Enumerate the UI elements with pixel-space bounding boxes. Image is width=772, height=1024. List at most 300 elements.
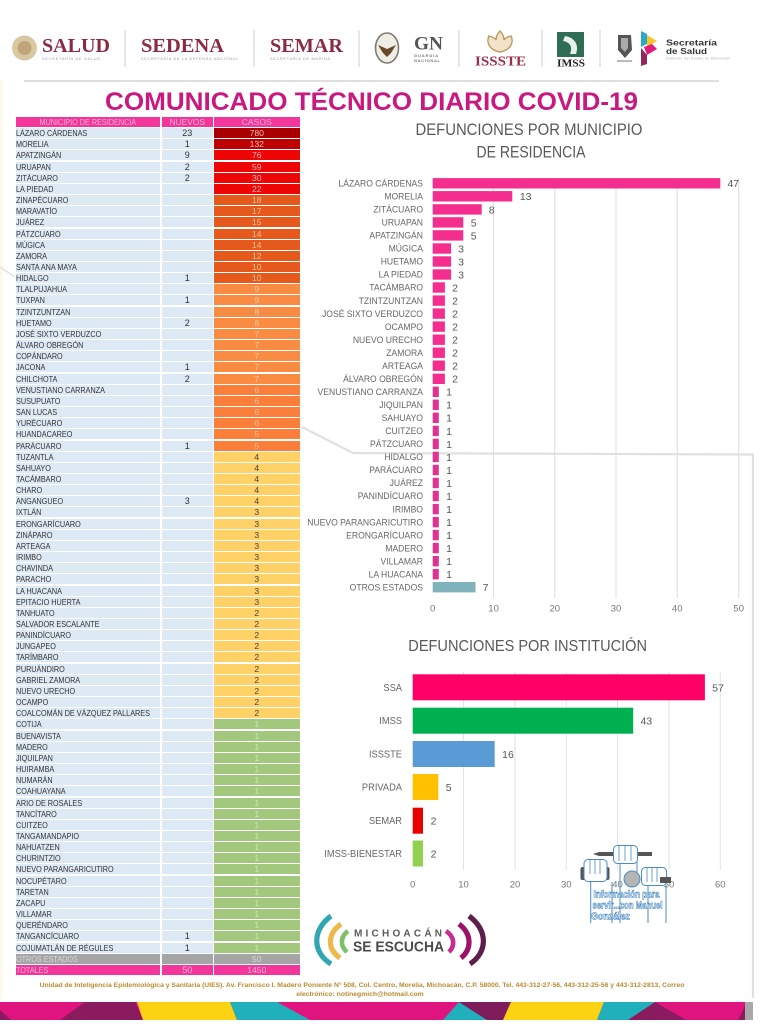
rows: 1 case (green): 1 <box>254 931 259 941</box>
footer contact text: Unidad de Inteligencia Epidemiológica y Sanitaria (UIES). Av. Francisco I. Madero Poniente N° 508, Col. Centro, Morelia, Michoacán, C.P. 58000. Tel. 443-312-27-56, 443-312-25-56 y 443-312-2813, Correo <box>40 982 684 989</box>
rows: 5 to 9 cases (orange): JOSÉ SIXTO VERDUZCO <box>16 329 101 339</box>
logo: SALUD <box>12 35 110 61</box>
rows: highest case counts (red): APATZINGÁN <box>16 150 61 160</box>
bar: IMSS-BIENESTAR 2: IMSS-BIENESTAR <box>324 849 402 860</box>
bars <box>433 178 720 592</box>
bar: PRIVADA 5: PRIVADA <box>362 782 403 794</box>
rows: 2 to 4 cases (yellow): IRIMBO <box>16 552 42 562</box>
table header: MUNICIPIO DE RESIDENCIA <box>40 117 136 127</box>
bar category labels: OTROS ESTADOS <box>350 582 423 592</box>
rows: 2 to 4 cases (yellow): 3 <box>254 519 259 529</box>
rows: 2 to 4 cases (yellow): 2 <box>254 619 259 629</box>
rows: 2 to 4 cases (yellow): 3 <box>254 574 259 584</box>
rows: 5 to 9 cases (orange): 8 <box>254 318 259 328</box>
rows: 1 case (green): 1 <box>254 786 259 796</box>
bar: SSA 57: 57 <box>712 682 724 694</box>
row: totales: 50 <box>182 965 192 975</box>
rows: highest case counts (red): LA PIEDAD <box>16 184 53 194</box>
rows: 5 to 9 cases (orange): JACONA <box>16 362 45 372</box>
rows: 10 to 18 cases (dark orange): 12 <box>252 251 262 261</box>
watermark text: Información para <box>594 890 660 900</box>
footer contact text <box>40 982 684 998</box>
bar value labels: 1 <box>446 517 452 529</box>
bar value labels: 2 <box>452 335 458 347</box>
rows: 5 to 9 cases (orange): COPÁNDARO <box>16 351 63 361</box>
rows: 2 to 4 cases (yellow): 2 <box>254 675 259 685</box>
rows: 2 to 4 cases (yellow): ZINÁPARO <box>16 530 53 540</box>
rows: 1 case (green): CUITZEO <box>16 820 48 830</box>
rows: 5 to 9 cases (orange): TUXPAN <box>16 295 45 305</box>
table header: NUEVOS <box>170 117 205 127</box>
rows: 2 to 4 cases (yellow): 3 <box>254 530 259 540</box>
watermark text: González <box>591 912 630 922</box>
bar category labels: IRIMBO <box>392 504 423 514</box>
logo: Guardia Nacional <box>376 33 443 63</box>
rows: 1 case (green): 1 <box>254 809 259 819</box>
rows: 2 to 4 cases (yellow): 2 <box>254 697 259 707</box>
rows: highest case counts (red): LÁZARO CÁRDENAS <box>16 128 87 138</box>
rows: 1 case (green): TARETAN <box>16 887 49 897</box>
bar value labels: 7 <box>483 582 489 594</box>
rows: 2 to 4 cases (yellow): 2 <box>254 641 259 651</box>
icon: hand with pencil <box>593 846 652 864</box>
rows: 1 case (green): 1 <box>185 943 190 953</box>
bar value labels: 1 <box>446 478 452 490</box>
x axis labels: 30 <box>611 604 621 614</box>
rows: 5 to 9 cases (orange): 9 <box>254 284 259 294</box>
rows: 5 to 9 cases (orange): CHILCHOTA <box>16 374 57 384</box>
rows: 2 to 4 cases (yellow): TUZANTLA <box>16 452 53 462</box>
bar category labels: APATZINGÁN <box>369 230 423 241</box>
bar value labels: 1 <box>446 439 452 451</box>
bar category labels: VENUSTIANO CARRANZA <box>318 387 423 397</box>
rows: 1 case (green): 1 <box>254 943 259 953</box>
rows: 10 to 18 cases (dark orange): ZAMORA <box>16 251 47 261</box>
rows: 5 to 9 cases (orange): 6 <box>254 407 259 417</box>
rows: 5 to 9 cases (orange): 9 <box>254 295 259 305</box>
rows: 10 to 18 cases (dark orange): 10 <box>252 273 262 283</box>
bar value labels: 5 <box>471 217 477 229</box>
rows: 2 to 4 cases (yellow): SAHUAYO <box>16 463 51 473</box>
logo: Michoacán state emblem <box>617 35 632 62</box>
rows: 1 case (green): BUENAVISTA <box>16 731 61 741</box>
bar category labels: MORELIA <box>384 191 423 202</box>
bar category labels: NUEVO PARANGARICUTIRO <box>307 517 423 527</box>
rows: 5 to 9 cases (orange): VENUSTIANO CARRANZA <box>16 385 105 395</box>
rows: highest case counts (red): ZITÁCUARO <box>16 173 58 183</box>
row: otros estados: 50 <box>252 954 262 964</box>
bar category labels: LÁZARO CÁRDENAS <box>339 178 423 189</box>
rows: 10 to 18 cases (dark orange): 1 <box>185 273 190 283</box>
rows: 1 case (green): TANCÍTARO <box>16 809 57 819</box>
rows: 2 to 4 cases (yellow): PURUÁNDIRO <box>16 664 65 674</box>
rows: 10 to 18 cases (dark orange): 10 <box>252 262 262 272</box>
rows: 2 to 4 cases (yellow): 3 <box>185 496 190 506</box>
rows: 5 to 9 cases (orange): HUANDACAREO <box>16 429 72 439</box>
x axis labels <box>430 604 744 614</box>
rows: 2 to 4 cases (yellow): CHAVINDA <box>16 563 53 573</box>
rows: highest case counts (red): 9 <box>185 150 190 160</box>
row: totales: 1450 <box>247 965 266 975</box>
bar: ISSSTE 16: 16 <box>502 749 514 761</box>
bar value labels: 2 <box>452 296 458 308</box>
logo: SEDENA: SEDENA <box>141 35 224 57</box>
rows: 2 to 4 cases (yellow): NUEVO URECHO <box>16 686 75 696</box>
bar value labels: 1 <box>446 491 452 503</box>
rows: 10 to 18 cases (dark orange): MÚGICA <box>16 240 45 250</box>
x axis labels: 20 <box>510 880 520 890</box>
rows: 1 case (green): 1 <box>254 864 259 874</box>
rows: 1 case (green): NOCUPÉTARO <box>16 876 67 886</box>
rows: highest case counts (red): 780 <box>250 128 264 138</box>
rows: 2 to 4 cases (yellow): JUNGAPEO <box>16 641 56 651</box>
logo: SEMAR: SECRETARÍA DE MARINA <box>270 57 330 61</box>
bar: IMSS 43: 43 <box>640 716 652 728</box>
bar category labels: PARÁCUARO <box>369 465 423 475</box>
rows: 5 to 9 cases (orange): 2 <box>185 374 190 384</box>
rows: 5 to 9 cases (orange) <box>16 284 300 451</box>
rows: 1 case (green): NUEVO PARANGARICUTIRO <box>16 864 114 874</box>
rows: 5 to 9 cases (orange): SAN LUCAS <box>16 407 57 417</box>
rows: 1 case (green): 1 <box>254 775 259 785</box>
rows: 10 to 18 cases (dark orange): SANTA ANA MAYA <box>16 262 77 272</box>
rows: 2 to 4 cases (yellow): EPITACIO HUERTA <box>16 597 80 607</box>
bar category labels: MADERO <box>385 543 423 553</box>
bar category labels: TZINTZUNTZAN <box>359 296 423 306</box>
rows: 1 case (green): 1 <box>254 842 259 852</box>
bar category labels: ZAMORA <box>386 348 423 358</box>
rows: 10 to 18 cases (dark orange): 17 <box>252 206 262 216</box>
footer contact text: electrónico: notinegmich@hotmail.com <box>296 991 424 998</box>
rows: 5 to 9 cases (orange): 7 <box>254 329 259 339</box>
bar category labels: ZITÁCUARO <box>373 204 423 215</box>
rows: 2 to 4 cases (yellow): ARTEAGA <box>16 541 50 551</box>
rows: 1 case (green): 1 <box>254 753 259 763</box>
rows: highest case counts (red): 22 <box>252 184 262 194</box>
rows: 2 to 4 cases (yellow): OCAMPO <box>16 697 48 707</box>
rows: 10 to 18 cases (dark orange): 18 <box>252 195 262 205</box>
rows: 1 case (green): 1 <box>254 920 259 930</box>
rows: 1 case (green): 1 <box>254 887 259 897</box>
bar value labels: 47 <box>727 178 739 190</box>
bar value labels: 1 <box>446 543 452 555</box>
rows: highest case counts (red): 76 <box>252 150 262 160</box>
rows: 1 case (green): 1 <box>254 876 259 886</box>
rows: 1 case (green): JIQUILPAN <box>16 753 53 763</box>
rows: 5 to 9 cases (orange): 6 <box>254 396 259 406</box>
row: totales: TOTALES <box>16 965 48 975</box>
rows: 5 to 9 cases (orange): 6 <box>254 385 259 395</box>
icon: hand with phone <box>580 860 610 882</box>
bar category labels: LA PIEDAD <box>379 269 423 280</box>
x axis labels: 20 <box>550 604 560 614</box>
rows: 5 to 9 cases (orange): 2 <box>185 318 190 328</box>
rows: 2 to 4 cases (yellow): 3 <box>254 507 259 517</box>
bar value labels: 3 <box>458 269 464 281</box>
rows: 2 to 4 cases (yellow): 2 <box>254 608 259 618</box>
bar value labels: 5 <box>471 230 477 242</box>
chart heading: DEFUNCIONES POR MUNICIPIO <box>416 121 643 139</box>
bar category labels: JOSÉ SIXTO VERDUZCO <box>322 309 423 319</box>
logo: Guardia Nacional: GN <box>414 34 443 54</box>
rows: 5 to 9 cases (orange): 8 <box>254 307 259 317</box>
x axis labels <box>410 880 726 890</box>
bar value labels: 3 <box>458 243 464 255</box>
rows: 5 to 9 cases (orange): ÁLVARO OBREGÓN <box>16 340 83 350</box>
rows: 2 to 4 cases (yellow): SALVADOR ESCALANTE <box>16 619 99 629</box>
rows: 2 to 4 cases (yellow): 4 <box>254 496 259 506</box>
rows: 2 to 4 cases (yellow): 3 <box>254 552 259 562</box>
bar value labels: 1 <box>446 530 452 542</box>
bar: PRIVADA 5: 5 <box>446 782 452 794</box>
bar value labels: 8 <box>489 204 495 216</box>
rows: highest case counts (red): 30 <box>252 173 262 183</box>
rows: 2 to 4 cases (yellow): 4 <box>254 452 259 462</box>
x axis labels: 40 <box>672 604 682 614</box>
rows: highest case counts (red): MORELIA <box>16 139 49 149</box>
rows: 1 case (green): 1 <box>254 719 259 729</box>
icon: hand with recorder <box>642 868 671 886</box>
bar value labels: 2 <box>452 348 458 360</box>
rows: 1 case (green): 1 <box>254 742 259 752</box>
bar category labels: CUITZEO <box>385 426 423 436</box>
bar category labels: ARTEAGA <box>382 361 423 371</box>
bar category labels: SAHUAYO <box>382 413 423 423</box>
bar value labels: 1 <box>446 452 452 464</box>
bar category labels: TACÁMBARO <box>369 282 423 293</box>
rows: highest case counts (red): 59 <box>252 162 262 172</box>
logo: Guardia Nacional: NACIONAL <box>414 58 441 63</box>
rows: 2 to 4 cases (yellow): COALCOMÁN DE VÁZQUEZ PALLARES <box>16 708 150 718</box>
rows: 2 to 4 cases (yellow): PANINDÍCUARO <box>16 630 71 640</box>
bar: IMSS 43: IMSS <box>379 716 402 727</box>
rows: 1 case (green): 1 <box>254 898 259 908</box>
rows: 1 case (green): MADERO <box>16 742 48 752</box>
rows: 10 to 18 cases (dark orange): JUÁREZ <box>16 217 44 227</box>
rows: highest case counts (red): 1 <box>185 139 190 149</box>
rows: 1 case (green): 1 <box>254 820 259 830</box>
chart heading: DE RESIDENCIA <box>476 144 586 162</box>
row: otros estados <box>16 954 300 964</box>
rows: 2 to 4 cases (yellow) <box>16 452 300 718</box>
rows: 2 to 4 cases (yellow): 2 <box>254 630 259 640</box>
rows: 1 case (green): 1 <box>254 909 259 919</box>
logo: ISSSTE: ISSSTE <box>475 54 526 70</box>
row: otros estados: OTROS ESTADOS <box>16 954 78 964</box>
rows: 1 case (green): CHURINTZIO <box>16 853 61 863</box>
bar: IMSS 43 <box>379 708 652 734</box>
rows: highest case counts (red) <box>16 128 300 194</box>
row: totales <box>16 965 300 975</box>
logo: ISSSTE <box>475 31 526 70</box>
rows: 1 case (green): HUIRAMBA <box>16 764 54 774</box>
rows: 1 case (green): ARIO DE ROSALES <box>16 798 82 808</box>
chart heading <box>416 121 643 162</box>
rows: 5 to 9 cases (orange): PARÁCUARO <box>16 441 61 451</box>
bar category labels: ÁLVARO OBREGÓN <box>343 374 423 384</box>
bar: SSA 57: SSA <box>383 683 403 694</box>
chart heading: DEFUNCIONES POR INSTITUCIÓN <box>408 636 647 655</box>
bar category labels: MÚGICA <box>389 243 423 254</box>
rows: 2 to 4 cases (yellow): 4 <box>254 485 259 495</box>
logo: Secretaría de Salud: de Salud <box>666 47 707 56</box>
rows: 10 to 18 cases (dark orange): 14 <box>252 229 262 239</box>
rows: 1 case (green): TANGAMANDAPIO <box>16 831 79 841</box>
logo: IMSS <box>557 32 586 70</box>
table header <box>16 117 300 127</box>
rows: 1 case (green): NAHUATZEN <box>16 842 60 852</box>
rows: 5 to 9 cases (orange): 5 <box>254 441 259 451</box>
rows: 2 to 4 cases (yellow): GABRIEL ZAMORA <box>16 675 80 685</box>
rows: 1 case (green): ZACAPU <box>16 898 45 908</box>
rows: 2 to 4 cases (yellow): 2 <box>254 686 259 696</box>
bar value labels: 1 <box>446 569 452 581</box>
logo: Michoacán se escucha: SE ESCUCHA <box>353 940 444 956</box>
bar rows <box>307 178 739 594</box>
rows: 10 to 18 cases (dark orange): HIDALGO <box>16 273 49 283</box>
rows: 5 to 9 cases (orange): 7 <box>254 374 259 384</box>
rows: 5 to 9 cases (orange): 6 <box>254 418 259 428</box>
bar category labels: LA HUACANA <box>369 569 423 579</box>
bar category labels: ERONGARÍCUARO <box>346 530 423 540</box>
rows: 2 to 4 cases (yellow): IXTLÁN <box>16 507 41 517</box>
rows: 2 to 4 cases (yellow): 4 <box>254 463 259 473</box>
rows: 10 to 18 cases (dark orange): 14 <box>252 240 262 250</box>
bar: IMSS-BIENESTAR 2 <box>324 840 437 866</box>
rows: highest case counts (red): 2 <box>185 173 190 183</box>
logo: IMSS: IMSS <box>557 58 586 70</box>
rows: 1 case (green): 1 <box>254 798 259 808</box>
bar category labels: JUÁREZ <box>390 478 424 488</box>
table: casos por municipio de residencia <box>16 117 300 975</box>
bar category labels: OCAMPO <box>385 322 423 332</box>
bar value labels: 2 <box>452 308 458 320</box>
title: COMUNICADO TÉCNICO DIARIO COVID-19 <box>105 87 638 116</box>
logo: SALUD: SECRETARÍA DE SALUD <box>42 57 100 61</box>
rows: 5 to 9 cases (orange): YURÉCUARO <box>16 418 62 428</box>
rows: highest case counts (red): 2 <box>185 162 190 172</box>
bar value labels: 1 <box>446 400 452 412</box>
rows: 2 to 4 cases (yellow): 3 <box>254 586 259 596</box>
bar value labels: 1 <box>446 387 452 399</box>
bar value labels: 1 <box>446 426 452 438</box>
rows: 1 case (green): COAHUAYANA <box>16 786 66 796</box>
rows: 1 case (green): 1 <box>254 764 259 774</box>
rows: 2 to 4 cases (yellow): TANHUATO <box>16 608 55 618</box>
rows: 5 to 9 cases (orange): SUSUPUATO <box>16 396 60 406</box>
rows: 2 to 4 cases (yellow): 2 <box>254 664 259 674</box>
bar category labels: PANINDÍCUARO <box>358 491 423 501</box>
watermark text <box>591 890 663 922</box>
rows: 1 case (green) <box>16 719 300 953</box>
bar: IMSS-BIENESTAR 2: 2 <box>431 848 437 860</box>
bar value labels <box>446 178 739 594</box>
rows: highest case counts (red): 23 <box>182 128 192 138</box>
bar category labels: HIDALGO <box>384 452 423 462</box>
rows: 5 to 9 cases (orange): 5 <box>254 429 259 439</box>
rows: 2 to 4 cases (yellow): 3 <box>254 541 259 551</box>
bar: SEMAR 2: 2 <box>431 816 437 828</box>
rows: highest case counts (red): 132 <box>250 139 264 149</box>
rows: 1 case (green): COTIJA <box>16 719 42 729</box>
rows: 1 case (green): 1 <box>254 731 259 741</box>
rows: 2 to 4 cases (yellow): PARACHO <box>16 574 51 584</box>
rows: 2 to 4 cases (yellow): LA HUACANA <box>16 586 62 596</box>
bar value labels: 1 <box>446 556 452 568</box>
rows: 10 to 18 cases (dark orange): 15 <box>252 217 262 227</box>
rows: 10 to 18 cases (dark orange): MARAVATÍO <box>16 206 57 216</box>
bar: SEMAR 2: SEMAR <box>369 816 402 827</box>
bar: ISSSTE 16 <box>369 741 514 767</box>
rows: 5 to 9 cases (orange): TLALPUJAHUA <box>16 284 67 294</box>
bar category labels: PÁTZCUARO <box>370 439 423 449</box>
logo: Guardia Nacional: GUARDIA <box>414 53 438 58</box>
bar value labels: 2 <box>452 322 458 334</box>
x axis labels: 40 <box>612 880 623 890</box>
rows: 1 case (green): 1 <box>254 853 259 863</box>
x axis labels: 30 <box>561 880 572 890</box>
x axis labels: 0 <box>410 880 415 890</box>
bar category labels: URUAPAN <box>382 217 423 228</box>
rows: 5 to 9 cases (orange): 1 <box>185 295 190 305</box>
x axis labels: 0 <box>430 604 435 614</box>
watermark text: servir...con Manuel <box>592 900 663 912</box>
x axis labels: 50 <box>664 880 674 890</box>
bar: ISSSTE 16: ISSSTE <box>369 749 403 761</box>
icon: microphone disc <box>624 871 640 887</box>
rows: 1 case (green): COJUMATLÁN DE RÉGULES <box>16 943 113 953</box>
logo: SEMAR: SEMAR <box>270 35 343 57</box>
rows: 2 to 4 cases (yellow): TACÁMBARO <box>16 474 61 484</box>
rows: 5 to 9 cases (orange): 1 <box>185 362 190 372</box>
bar: PRIVADA 5 <box>362 774 452 800</box>
bar value labels: 3 <box>458 256 464 268</box>
rows: 10 to 18 cases (dark orange): ZINAPÉCUARO <box>16 195 68 205</box>
bar value labels: 13 <box>520 191 532 203</box>
logo: Secretaría de Salud: Gobierno del Estado de Michoacán <box>666 56 730 60</box>
rows: 1 case (green): 1 <box>254 831 259 841</box>
rows: 2 to 4 cases (yellow): TARÍMBARO <box>16 652 59 662</box>
x axis labels: 10 <box>488 604 499 614</box>
bar category labels: NUEVO URECHO <box>353 335 423 345</box>
bar value labels: 2 <box>452 282 458 294</box>
rows: 2 to 4 cases (yellow): 4 <box>254 474 259 484</box>
x axis labels: 10 <box>458 880 469 890</box>
rows: 2 to 4 cases (yellow): CHARO <box>16 485 42 495</box>
logo: Secretaría de Salud <box>641 31 730 66</box>
logo: Michoacán se escucha: MICHOACÁN <box>354 926 442 940</box>
bar category labels <box>307 178 424 592</box>
rows: 5 to 9 cases (orange): TZINTZUNTZAN <box>16 307 70 317</box>
rows: 5 to 9 cases (orange): 7 <box>254 340 259 350</box>
rows: 2 to 4 cases (yellow): 3 <box>254 597 259 607</box>
rows: 1 case (green): QUERÉNDARO <box>16 920 68 930</box>
logo: SALUD: SALUD <box>42 35 110 57</box>
rows: 2 to 4 cases (yellow): 3 <box>254 563 259 573</box>
rows: 2 to 4 cases (yellow): ERONGARÍCUARO <box>16 519 81 529</box>
x axis labels: 60 <box>715 880 726 890</box>
rows: 1 case (green): NUMARÁN <box>16 775 53 785</box>
rows: highest case counts (red): URUAPAN <box>16 162 51 172</box>
bar category labels: VILLAMAR <box>381 556 424 566</box>
bar category labels: JIQUILPAN <box>379 400 423 410</box>
x axis labels: 50 <box>733 604 744 614</box>
rows: 5 to 9 cases (orange): 1 <box>185 441 190 451</box>
rows: 2 to 4 cases (yellow): 2 <box>254 708 259 718</box>
bar value labels: 1 <box>446 504 452 516</box>
rows: 1 case (green): 1 <box>185 931 190 941</box>
bar value labels: 2 <box>452 361 458 373</box>
